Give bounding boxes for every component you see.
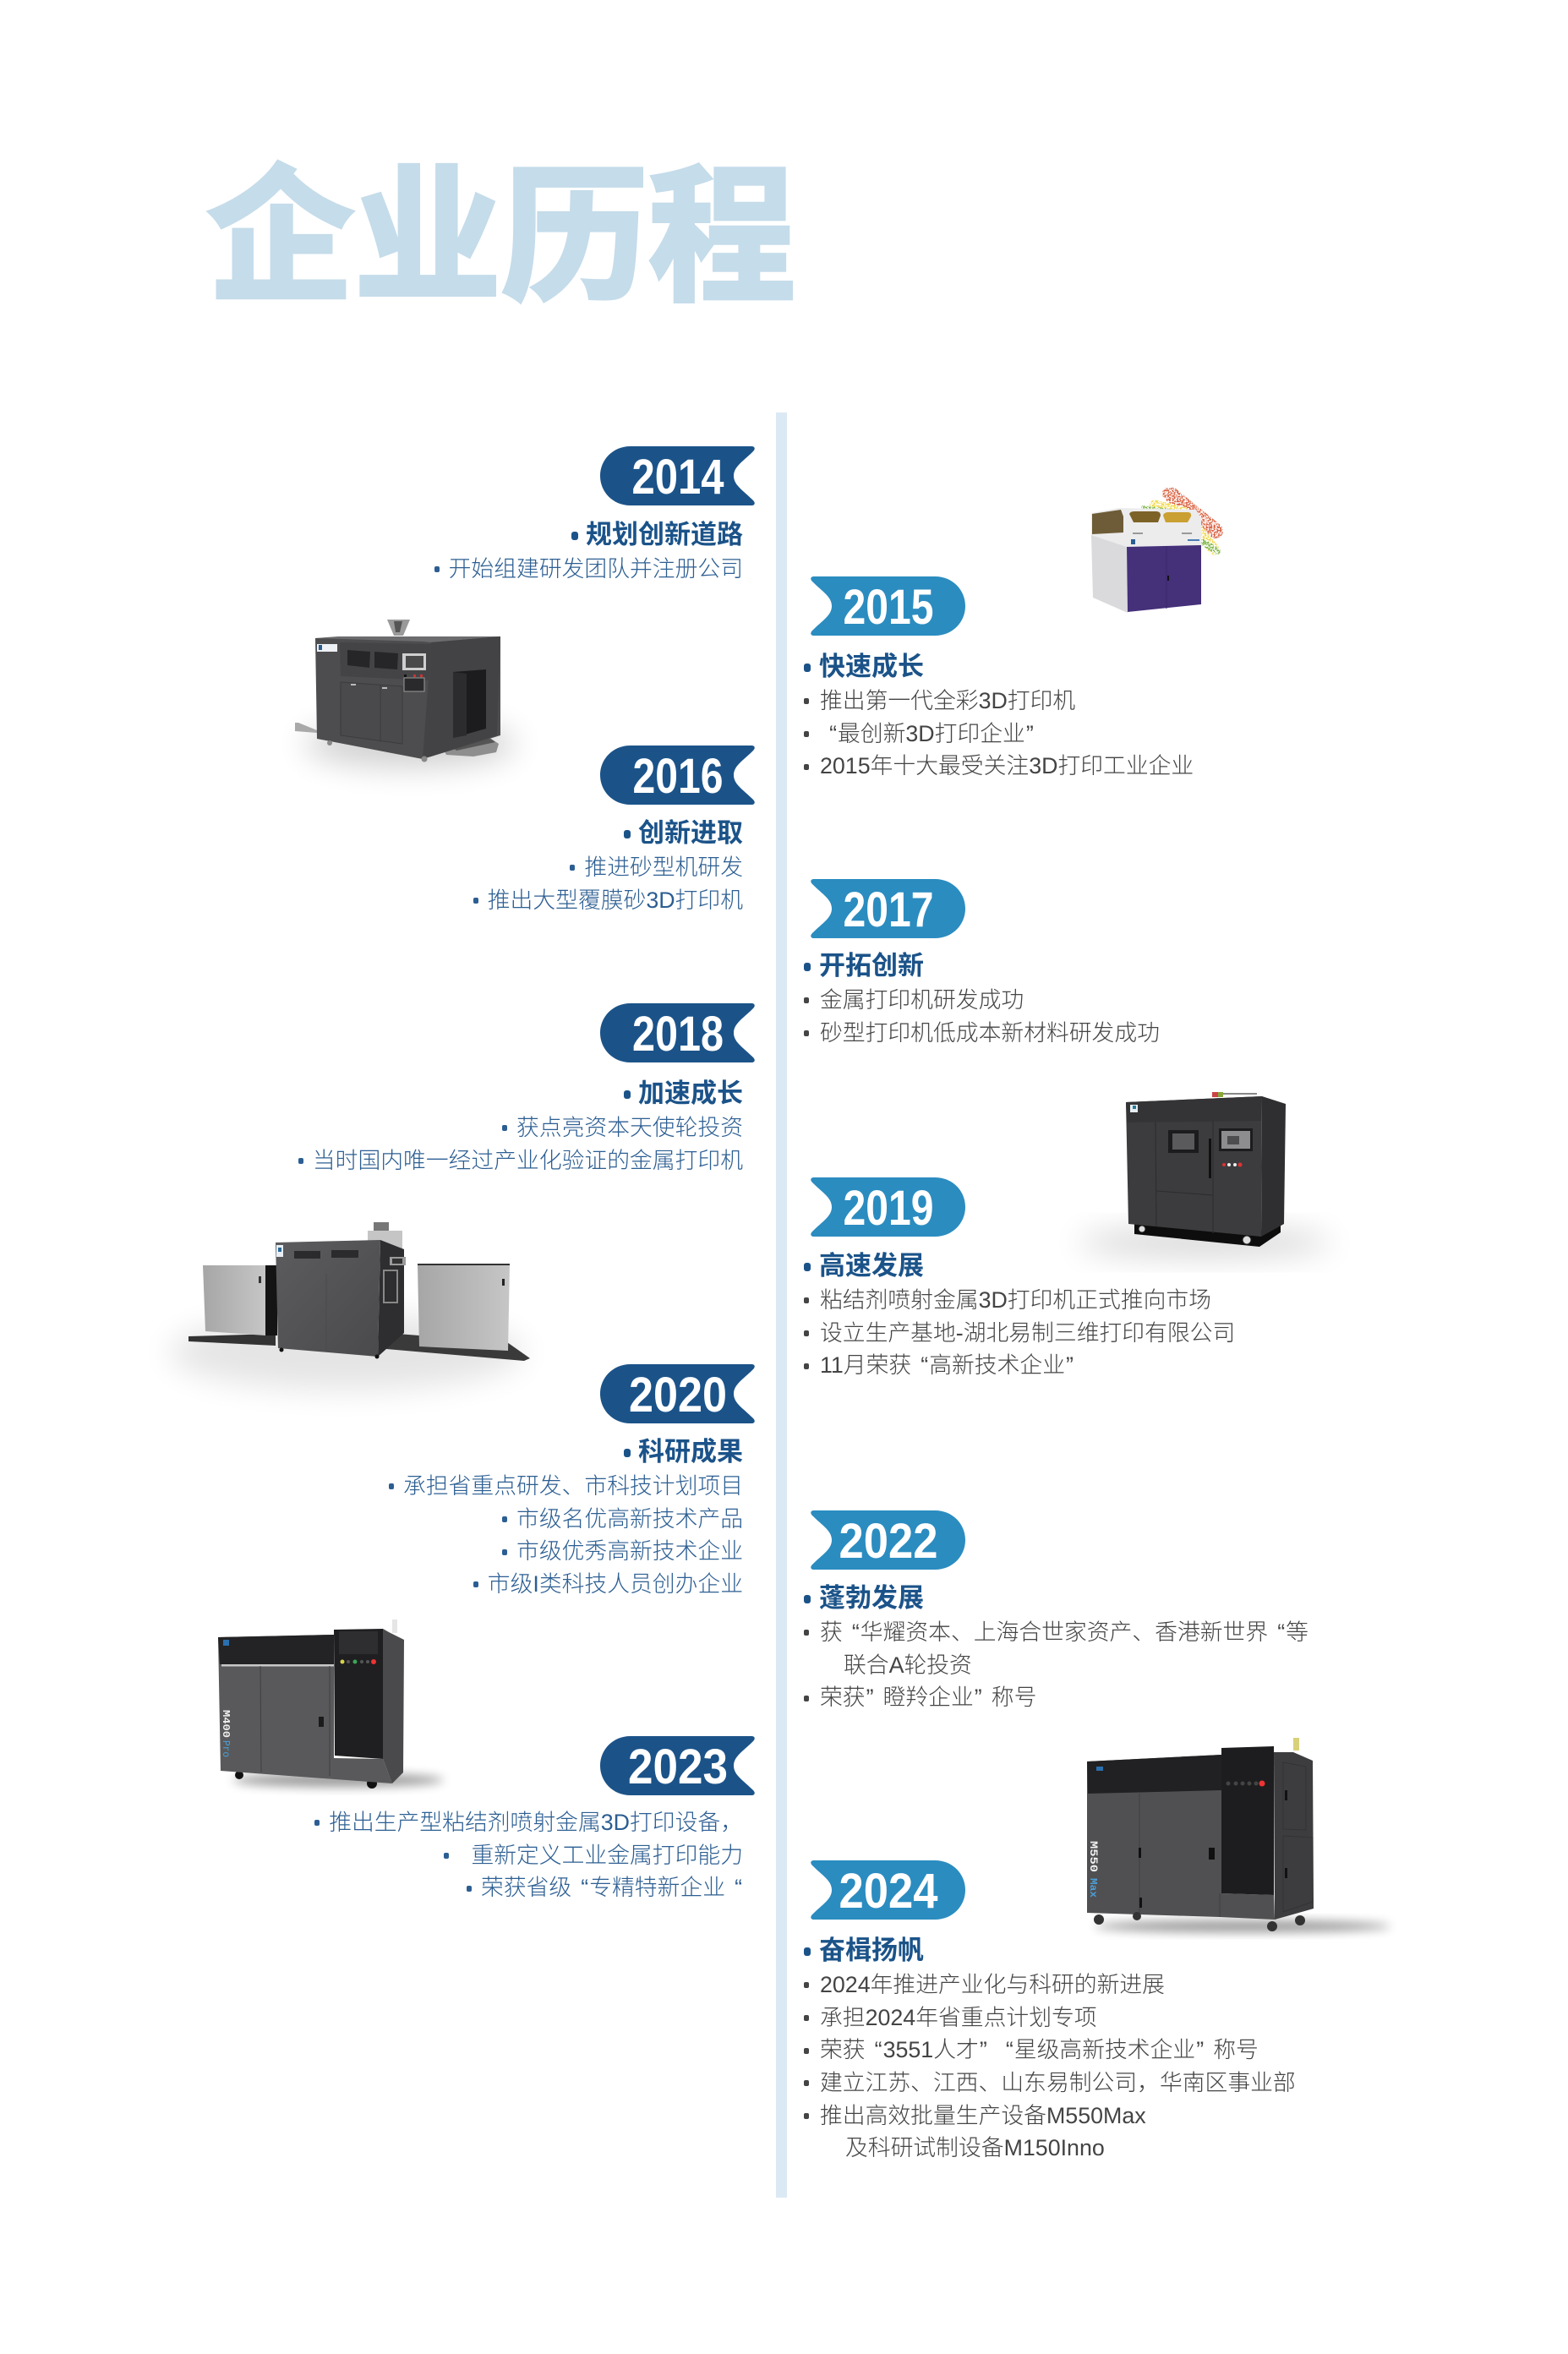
text block: 2015: “ — [829, 721, 837, 746]
badge 2014: 2014 — [632, 450, 724, 505]
badge 2017 — [811, 879, 965, 938]
text block: 2016: 推进砂型机研发 — [584, 855, 743, 880]
machine: 2023 M400 Pro — [218, 1619, 444, 1789]
text block: 2023: 重新定义工业金属打印能力 — [471, 1843, 743, 1868]
badge 2024 — [811, 1860, 965, 1920]
machine: 2019 metal printer — [1078, 1092, 1331, 1256]
text block: 2018: 当时国内唯一经过产业化验证的金属打印机 — [313, 1148, 743, 1173]
text block: 2019: 粘结剂喷射金属3D打印机正式推向市场 — [820, 1287, 1211, 1313]
machine: 2024 M550 Max: Max — [1087, 1878, 1099, 1898]
machine: 2016 sand printer — [295, 620, 516, 767]
badge 2019: 2019 — [844, 1181, 933, 1236]
text block: 2019 — [804, 1251, 1235, 1378]
text block: 2022: 荣获 瞪羚企业 称号 — [820, 1685, 1036, 1710]
text block: 2022 — [804, 1583, 1308, 1710]
text block: 2014: 开始组建研发团队并注册公司 — [449, 556, 743, 582]
text block: 2023: 推出生产型粘结剂喷射金属3D打印设备， — [329, 1810, 743, 1835]
machine: 2023 M400 Pro: Pro — [220, 1740, 231, 1757]
text block: 2024: 奋楫扬帆 — [819, 1936, 924, 1965]
badge 2022 — [811, 1510, 965, 1570]
text block: 2024: 承担2024年省重点计划专项 — [820, 2005, 1097, 2030]
text block: 2017: 金属打印机研发成功 — [820, 987, 1024, 1013]
badge 2023 — [600, 1736, 755, 1795]
text block: 2020: 市级名优高新技术产品 — [516, 1506, 743, 1532]
text block: 2019: “ — [921, 1352, 928, 1378]
text block: 2024: ” — [980, 2037, 987, 2062]
text block: 2023: 荣获省级 专精特新企业 — [481, 1875, 725, 1900]
text block: 2015: 快速成长 — [819, 652, 924, 681]
text block: 2016: 创新进取 — [638, 818, 743, 848]
text block: 2017: 开拓创新 — [819, 951, 924, 980]
badge 2022: 2022 — [839, 1514, 938, 1569]
badge 2018 — [600, 1003, 755, 1062]
title: 企业历程 — [207, 155, 795, 320]
text block: 2022: 蓬勃发展 — [819, 1583, 924, 1613]
text block: 2014 — [434, 520, 743, 582]
text block: 2022: “ — [1277, 1619, 1285, 1645]
text block: 2015: 推出第一代全彩3D打印机 — [820, 688, 1075, 713]
text block: 2017 — [804, 951, 1160, 1046]
text block: 2020: 承担省重点研发、市科技计划项目 — [403, 1473, 743, 1499]
text block: 2024 — [804, 1936, 1296, 2160]
text block: 2022: “ — [852, 1619, 860, 1645]
text block: 2023 — [314, 1810, 743, 1900]
text block: 2024: 及科研试制设备M150Inno — [845, 2135, 1105, 2160]
badge 2019 — [811, 1177, 965, 1237]
text block: 2018 — [298, 1079, 743, 1173]
text block: 2018: 加速成长 — [638, 1079, 743, 1108]
text block: 2020: 市级优秀高新技术企业 — [516, 1538, 743, 1564]
text block: 2022: 联合A轮投资 — [844, 1652, 972, 1678]
text block: 2015 — [804, 652, 1194, 778]
machine: 2018 metal printer with cabinets — [169, 1222, 530, 1390]
text block: 2017: 砂型打印机低成本新材料研发成功 — [820, 1020, 1160, 1046]
badge 2020: 2020 — [629, 1368, 727, 1423]
text block: 2019: 高速发展 — [819, 1251, 924, 1281]
badge 2015: 2015 — [844, 580, 933, 635]
text block: 2015: 最创新3D打印企业 — [838, 721, 1025, 746]
machine: 2015 full-colour printer — [1091, 494, 1217, 613]
text block: 2020: 市级I类科技人员创办企业 — [488, 1571, 743, 1597]
text block: 2020: 科研成果 — [638, 1437, 743, 1466]
text block: 2016: 推出大型覆膜砂3D打印机 — [488, 888, 743, 913]
text block: 2019: 设立生产基地-湖北易制三维打印有限公司 — [820, 1320, 1235, 1346]
text block: 2016 — [473, 818, 743, 913]
text block: 2020 — [389, 1437, 743, 1597]
timeline axis — [776, 412, 787, 2198]
text block: 2023: “ — [735, 1875, 742, 1900]
text block: 2022: ” — [975, 1685, 982, 1710]
text block: 2018: 获点亮资本天使轮投资 — [516, 1115, 743, 1140]
badge 2020 — [600, 1364, 755, 1423]
machine: 2023 M400 Pro: M400 — [220, 1710, 231, 1738]
badge 2015 — [811, 576, 965, 636]
text block: 2022: ” — [866, 1685, 874, 1710]
text block: 2023: “ — [581, 1875, 588, 1900]
text block: 2022: 获 华耀资本、上海合世家资产、香港新世界 等 — [820, 1619, 1308, 1645]
text block: 2014: 规划创新道路 — [586, 520, 743, 549]
badge 2023: 2023 — [628, 1740, 728, 1794]
badge 2016: 2016 — [632, 749, 724, 804]
text block: 2024: ” — [1196, 2037, 1204, 2062]
text block: 2024: 推出高效批量生产设备M550Max — [820, 2103, 1146, 2128]
text block: 2015: ” — [1026, 721, 1034, 746]
text block: 2024: “ — [875, 2037, 882, 2062]
badge 2017: 2017 — [844, 882, 933, 937]
badge 2024: 2024 — [839, 1864, 938, 1919]
badge 2016 — [600, 746, 755, 805]
machine: 2024 M550 Max — [1087, 1738, 1390, 1932]
badge 2014 — [600, 446, 755, 505]
text block: 2015: 2015年十大最受关注3D打印工业企业 — [820, 753, 1194, 778]
machine: 2024 M550 Max: M550 — [1087, 1841, 1100, 1872]
text block: 2019: ” — [1066, 1352, 1074, 1378]
badge 2018: 2018 — [632, 1007, 724, 1062]
text block: 2019: 11月荣获 高新技术企业 — [820, 1352, 1065, 1378]
text block: 2024: 建立江苏、江西、山东易制公司，华南区事业部 — [820, 2070, 1296, 2095]
text block: 2024: 2024年推进产业化与科研的新进展 — [820, 1972, 1165, 1997]
text block: 2024: 荣获 3551人才 星级高新技术企业 称号 — [820, 2037, 1259, 2062]
text block: 2024: “ — [1006, 2037, 1013, 2062]
